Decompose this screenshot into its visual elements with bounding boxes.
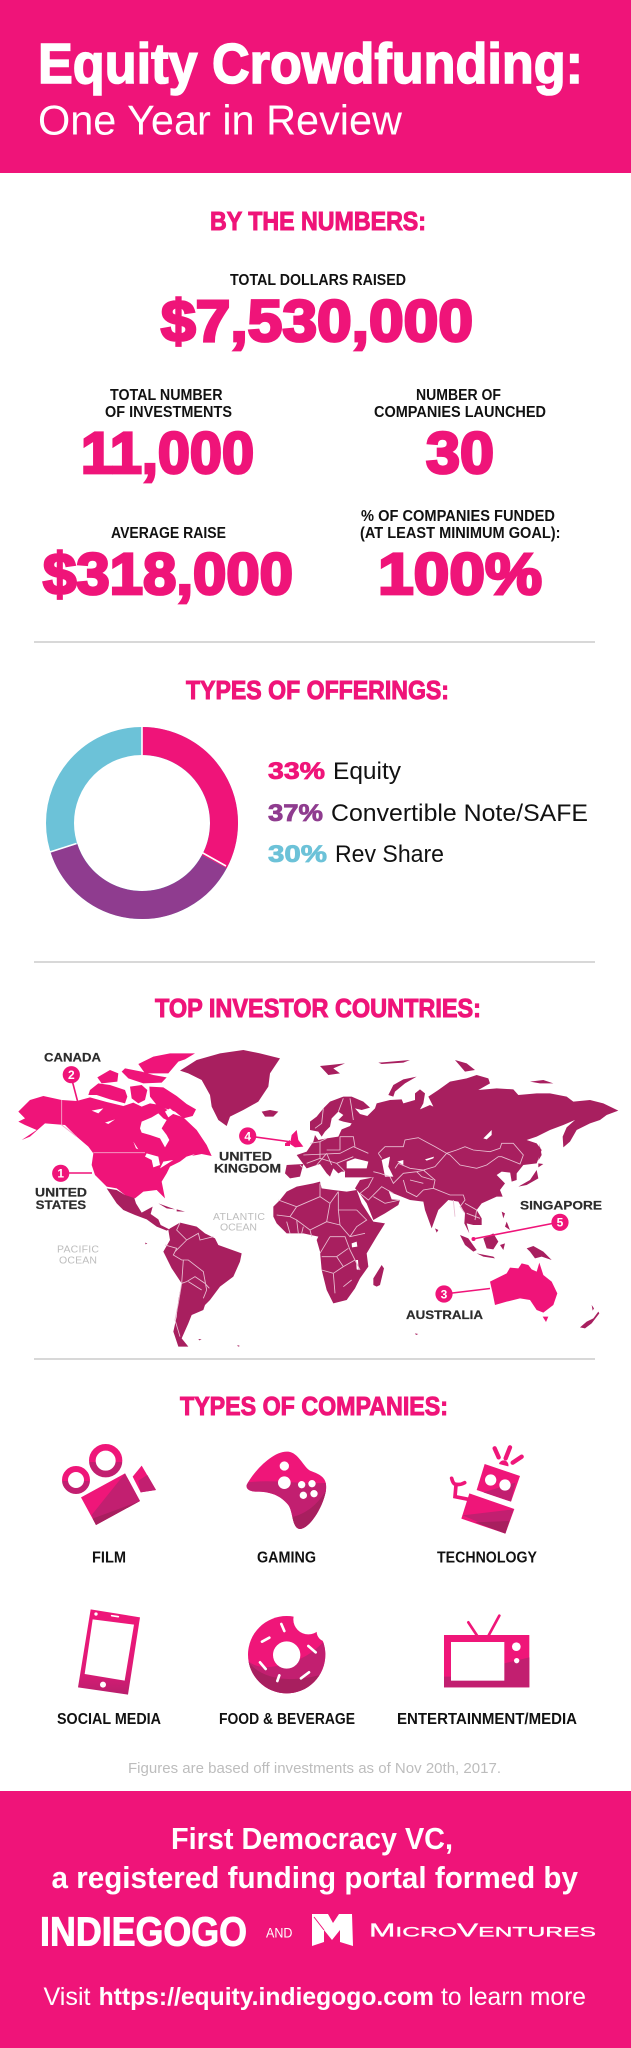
and: AND: [266, 1926, 293, 1941]
stat: companies launched: COMPANIES LAUNCHED: [374, 404, 546, 421]
donut chart: [50, 727, 226, 905]
Caribbean islands: [158, 1203, 185, 1212]
callout 3: Australia: 3: [441, 1287, 448, 1301]
Greenland: [180, 1050, 280, 1126]
Southeast Asian borders: [453, 1200, 480, 1220]
stat: average raise: AVERAGE RAISE: [111, 525, 226, 542]
lakes: [92, 1108, 195, 1168]
country borders: [165, 1098, 523, 1337]
stat: companies launched: 30: [426, 421, 494, 486]
subtitle: One Year in Review: [38, 96, 403, 144]
Africa: [273, 1182, 385, 1303]
Asian and Pacific islands: [435, 1212, 599, 1328]
callout 4: United Kingdom: KINGDOM: [214, 1162, 281, 1176]
callout 2: Canada: 2: [68, 1068, 75, 1082]
call to action: https://equity.indiegogo.com: [99, 1983, 434, 2011]
stat: total number of investments: TOTAL NUMBER: [110, 387, 222, 404]
Mexico and Central America: [107, 1188, 169, 1231]
heading: types of offerings: TYPES OF OFFERINGS:: [186, 675, 449, 705]
label: Pacific Ocean: OCEAN: [59, 1254, 97, 1266]
call to action: to learn more: [441, 1983, 586, 2011]
legend: 37%: [268, 800, 323, 827]
label: Atlantic Ocean: [213, 1211, 265, 1234]
Canadian Arctic islands: [88, 1053, 196, 1118]
stat: total number of investments: OF INVESTMENTS: [105, 404, 232, 421]
world map: [18, 1050, 618, 1347]
icon: smartphone: [78, 1609, 140, 1695]
label: entertainment/media: ENTERTAINMENT/MEDIA: [397, 1711, 577, 1728]
legend: 30%: [268, 841, 327, 868]
header banner: [0, 0, 631, 173]
callout 1: United States: [35, 1165, 92, 1212]
logo: Indiegogo: INDIEGOGO: [40, 1908, 247, 1954]
Madagascar: [373, 1265, 384, 1287]
map: highlighted countries: [18, 1053, 303, 1198]
USA and Canada: [18, 1096, 212, 1198]
inland seas: [347, 1130, 492, 1270]
label: food and beverage: FOOD & BEVERAGE: [219, 1711, 355, 1728]
heading: types of companies: TYPES OF COMPANIES:: [180, 1391, 448, 1421]
Arctic islands: [320, 1060, 553, 1097]
panel: by the numbers: [43, 206, 560, 607]
logo: MicroVentures wordmark: M ICRO V ENTURES: [369, 1921, 596, 1941]
stat: total dollars raised: $7,530,000: [161, 289, 473, 354]
footer headline: First Democracy VC,: [171, 1821, 453, 1856]
South America: [163, 1223, 242, 1347]
Eurasia: [285, 1075, 618, 1233]
callout 4: United Kingdom: UNITED: [219, 1150, 272, 1164]
callout 2: Canada: [44, 1051, 101, 1101]
South American borders: [165, 1223, 213, 1337]
Australia: [490, 1263, 557, 1322]
African borders: [277, 1183, 367, 1293]
icon: robot: [452, 1447, 522, 1534]
remote dots: [145, 1243, 418, 1347]
callout 2: Canada: CANADA: [44, 1051, 101, 1065]
callout 4: United Kingdom: [214, 1127, 292, 1176]
stat: percent funded: 100%: [378, 542, 542, 607]
heading: top investor countries: TOP INVESTOR COUNTRIES:: [155, 993, 481, 1023]
stat: total number of investments: [81, 387, 254, 486]
logo: MicroVentures mark: [312, 1914, 353, 1946]
United Kingdom: [285, 1130, 303, 1147]
icon: game controller: [246, 1452, 326, 1529]
footnote: Figures are based off investments as of Nov 20th, 2017.: [128, 1760, 501, 1777]
panel: types of companies: [57, 1391, 577, 1777]
label: film: FILM: [92, 1550, 126, 1567]
title: Equity Crowdfunding:: [38, 32, 583, 96]
Hudson Bay: [140, 1108, 175, 1147]
label: technology: TECHNOLOGY: [437, 1550, 538, 1567]
callout 4: United Kingdom: 4: [244, 1129, 251, 1143]
callout 3: Australia: [406, 1285, 490, 1322]
label: Pacific Ocean: PACIFIC: [57, 1244, 99, 1256]
callout 5: Singapore: 5: [557, 1216, 564, 1230]
map: rest of world: [107, 1050, 618, 1347]
stat: total number of investments: 11,000: [81, 421, 254, 486]
stat: companies launched: [374, 387, 546, 486]
call to action: Visit: [44, 1983, 91, 2011]
callout 5: Singapore: SINGAPORE: [520, 1198, 602, 1212]
callout 1: United States: UNITED: [35, 1186, 87, 1200]
stat: companies launched: NUMBER OF: [416, 387, 501, 404]
callout 3: Australia: AUSTRALIA: [406, 1308, 483, 1322]
legend: 33%: [268, 758, 325, 785]
legend: Convertible Note/SAFE: [331, 800, 588, 827]
legend: Equity: [333, 758, 401, 785]
icon: film camera: [65, 1447, 156, 1525]
footer banner: [0, 1791, 631, 2048]
heading: by the numbers: BY THE NUMBERS:: [210, 206, 426, 236]
callout 5: Singapore: [472, 1198, 602, 1241]
stat: percent funded: (AT LEAST MINIMUM GOAL):: [360, 525, 560, 542]
callout 1: United States: 1: [57, 1166, 64, 1180]
label: Atlantic Ocean: OCEAN: [220, 1222, 257, 1234]
icon: television: [444, 1616, 529, 1687]
label: gaming: GAMING: [257, 1550, 316, 1567]
call to action: [44, 1983, 586, 2011]
footer headline: a registered funding portal formed by: [52, 1860, 579, 1895]
label: Pacific Ocean: [57, 1244, 99, 1266]
stat: percent funded: % OF COMPANIES FUNDED: [361, 508, 555, 525]
label: Atlantic Ocean: ATLANTIC: [213, 1211, 265, 1223]
stat: total dollars raised: TOTAL DOLLARS RAISED: [230, 272, 406, 289]
label: social media: SOCIAL MEDIA: [57, 1711, 161, 1728]
callout 1: United States: STATES: [36, 1198, 86, 1212]
Japan: [510, 1143, 543, 1187]
legend: [268, 758, 588, 868]
panel: top investor countries: [18, 993, 618, 1347]
panel: types of offerings: [50, 675, 588, 905]
stat: average raise: $318,000: [43, 542, 293, 607]
Iceland: [262, 1110, 278, 1117]
stat: percent funded: [360, 508, 560, 607]
legend: Rev Share: [335, 841, 444, 868]
icon: donut: [248, 1616, 326, 1694]
US and Canada border: [62, 1100, 145, 1153]
footer headline: [52, 1821, 579, 1895]
